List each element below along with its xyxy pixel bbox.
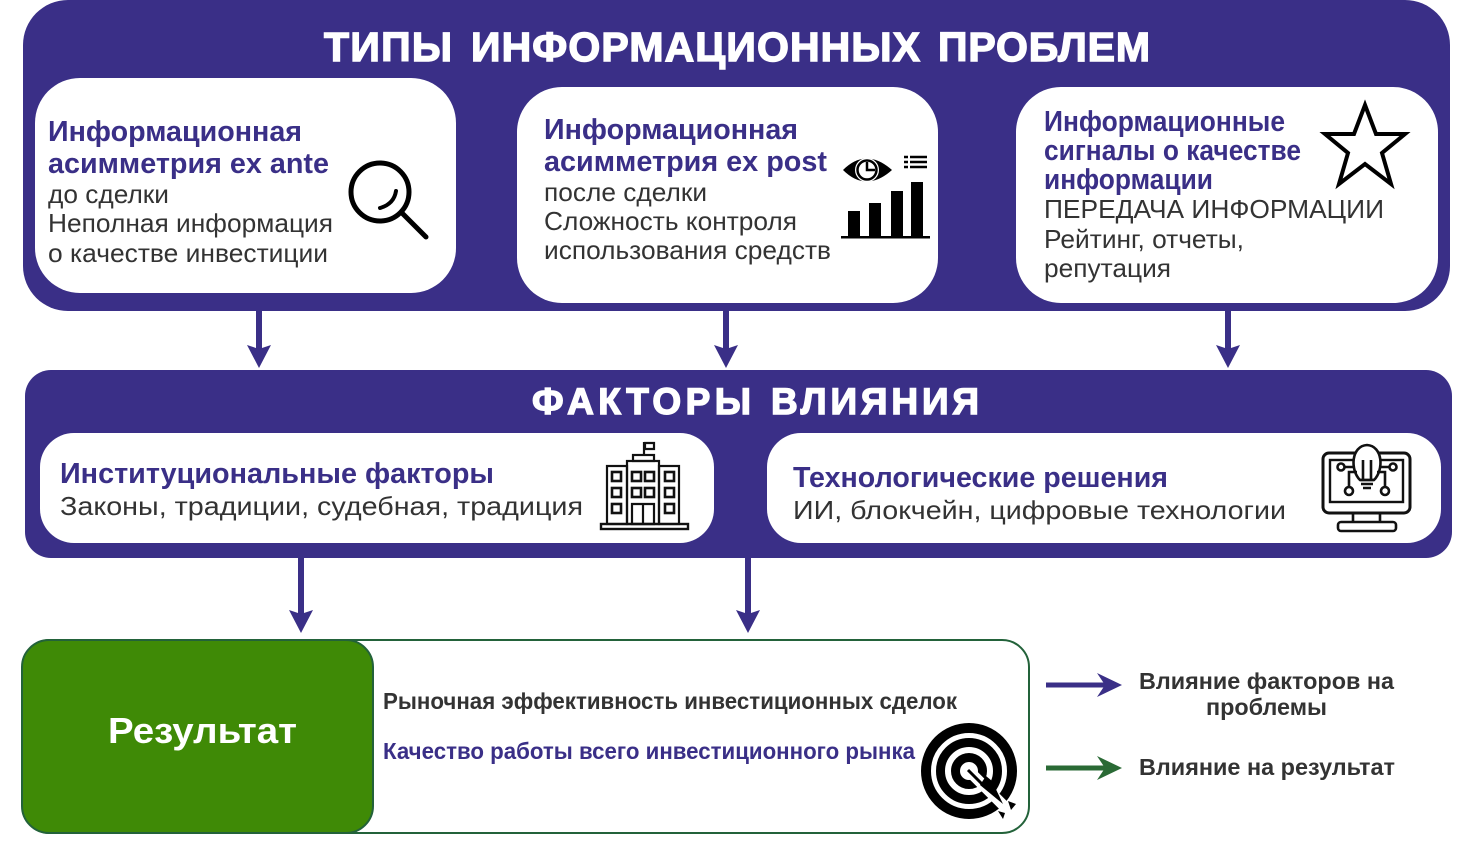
heading: types of information problems: ТИПЫ (324, 24, 452, 70)
icon: star (1325, 105, 1405, 184)
card: ex ante asymmetry: о качестве инвестиции (48, 238, 328, 268)
card: institutional factors (40, 433, 714, 543)
text: legend factors on problems: проблемы (1206, 694, 1327, 720)
card: ex post asymmetry: Сложность контроля (544, 206, 797, 236)
panel: influencing factors (25, 370, 1452, 558)
card: ex post asymmetry: Информационная (544, 114, 798, 146)
card: information signals: информации (1044, 164, 1213, 196)
arrow: technological solutions to result (736, 558, 760, 633)
card: ex ante asymmetry: асимметрия ex ante (48, 148, 329, 180)
card: ex post asymmetry: после сделки (544, 177, 707, 207)
card: information signals: Информационные (1044, 106, 1285, 138)
card: ex post asymmetry: асимметрия ex post (544, 146, 827, 178)
arrow: legend navy (1046, 673, 1122, 697)
heading: types of information problems (324, 24, 1150, 70)
card: ex ante asymmetry (35, 78, 456, 293)
arrow: institutional factors to result (289, 558, 313, 633)
card: information signals: ПЕРЕДАЧА ИНФОРМАЦИИ (1044, 194, 1384, 224)
text: legend effect on result: Влияние на результат (1139, 754, 1395, 780)
heading: influencing factors (532, 381, 979, 422)
block: result label: Результат (108, 710, 297, 751)
text: legend factors on problems (1139, 668, 1394, 720)
arrow: signals to factors (1216, 311, 1240, 368)
card: institutional factors: Институциональные факторы (60, 458, 494, 490)
icon: magnifier (351, 163, 426, 237)
card: information signals: сигналы о качестве (1044, 135, 1301, 167)
text: legend factors on problems: Влияние факторов на (1139, 668, 1394, 694)
card: ex post asymmetry: использования средств (544, 235, 831, 265)
card: information signals: Рейтинг, отчеты, (1044, 224, 1244, 254)
card: technological solutions: ИИ, блокчейн, цифровые технологии (793, 495, 1286, 525)
card: institutional factors: Законы, традиции, судебная, традиция (60, 491, 583, 521)
icon: monitor with light bulb (1323, 445, 1410, 531)
arrow: legend green (1046, 756, 1122, 780)
heading: types of information problems: ПРОБЛЕМ (938, 24, 1150, 70)
text: market efficiency: Рыночная эффективность инвестиционных сделок (383, 688, 957, 714)
card: ex ante asymmetry: Информационная (48, 116, 302, 148)
card: technological solutions: Технологические решения (793, 462, 1168, 494)
arrow: ex post to factors (714, 311, 738, 368)
icon: building (601, 442, 688, 529)
panel: types of information problems (23, 0, 1450, 311)
card: ex post asymmetry (517, 87, 938, 303)
icon: target with dart (926, 728, 1016, 819)
heading: influencing factors: ВЛИЯНИЯ (771, 381, 979, 422)
card: information signals (1016, 87, 1438, 303)
card: ex ante asymmetry: Неполная информация (48, 208, 333, 238)
arrow: ex ante to factors (247, 311, 271, 368)
card: information signals: репутация (1044, 253, 1171, 283)
heading: influencing factors: ФАКТОРЫ (532, 381, 751, 422)
text: market quality: Качество работы всего инвестиционного рынка (383, 738, 915, 764)
panel: result (22, 640, 1029, 833)
legend (1046, 668, 1395, 780)
block: result label (22, 640, 373, 833)
card: technological solutions (767, 433, 1441, 543)
icon: eye and bar chart (841, 157, 930, 238)
heading: types of information problems: ИНФОРМАЦИОННЫХ (471, 24, 920, 70)
card: ex ante asymmetry: до сделки (48, 179, 169, 209)
